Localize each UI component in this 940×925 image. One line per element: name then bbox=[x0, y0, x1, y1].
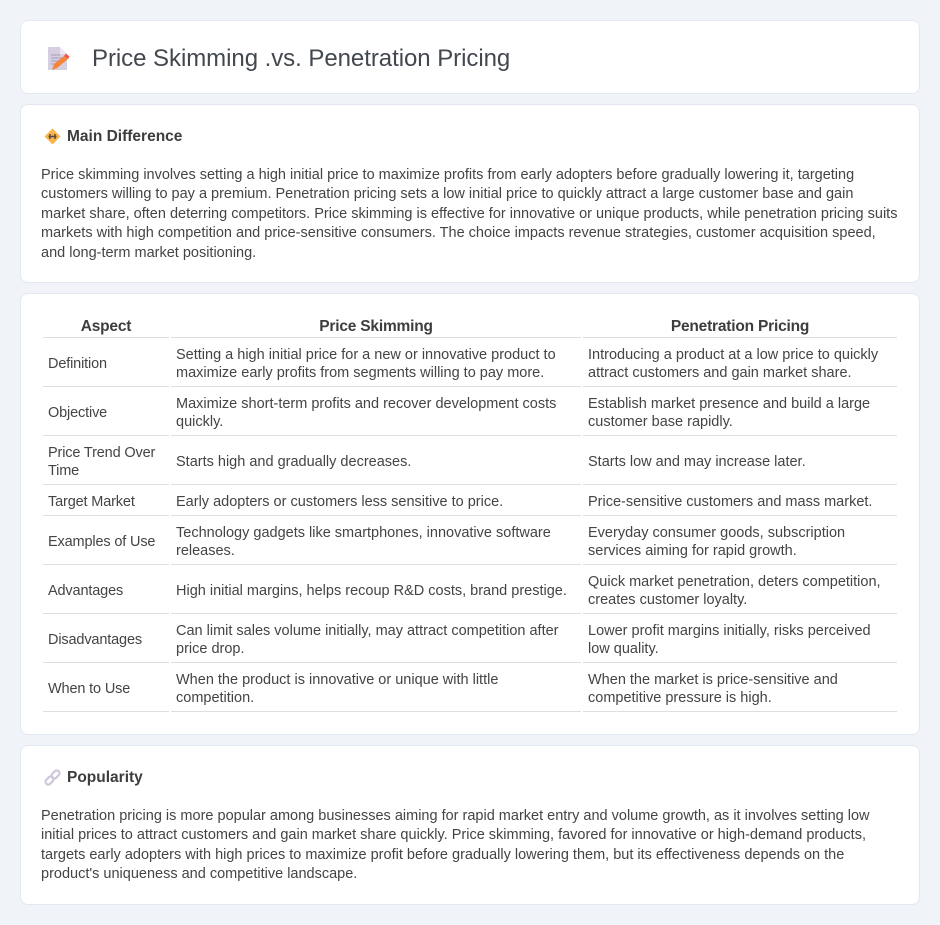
row: when to use bbox=[48, 672, 838, 706]
row: when to use: competitive pressure is high. bbox=[588, 690, 772, 706]
row: when to use: When to Use bbox=[48, 681, 130, 697]
row: disadvantages bbox=[48, 623, 871, 657]
panel: main difference bbox=[20, 104, 920, 283]
row: definition: maximize early profits from segments willing to pay more. bbox=[176, 365, 544, 381]
text block: main difference paragraph bbox=[41, 167, 897, 261]
row: advantages: creates customer loyalty. bbox=[588, 592, 747, 608]
row: definition: Introducing a product at a low price to quickly bbox=[588, 347, 878, 363]
row: price trend over time bbox=[48, 445, 806, 479]
text block: main difference paragraph: markets with high competition and price-sensitive consumers. The choice impacts revenue strategies, customer acquisition speed, bbox=[41, 225, 876, 241]
title: Price Skimming .vs. Penetration Pricing bbox=[92, 45, 510, 72]
row: objective: Objective bbox=[48, 405, 107, 421]
text block: popularity paragraph: Penetration pricing is more popular among businesses aiming for rapid market entry and volume growth, as it involves setting low bbox=[41, 808, 870, 824]
row: disadvantages: Can limit sales volume initially, may attract competition after bbox=[176, 623, 559, 639]
row: target market: Price-sensitive customers and mass market. bbox=[588, 494, 872, 510]
row: price trend over time: Price Trend Over bbox=[48, 445, 155, 461]
row: examples of use: services aiming for rapid growth. bbox=[588, 543, 797, 559]
row: objective: Establish market presence and build a large bbox=[588, 396, 870, 412]
row: objective: quickly. bbox=[176, 414, 223, 430]
icon: chain link bbox=[44, 769, 61, 786]
row: examples of use: Everyday consumer goods, subscription bbox=[588, 525, 845, 541]
row: disadvantages: low quality. bbox=[588, 641, 659, 657]
row: advantages bbox=[48, 574, 881, 608]
row: price trend over time: Starts low and may increase later. bbox=[588, 454, 806, 470]
heading: popularity: Popularity bbox=[67, 769, 143, 786]
icon: document with pencil bbox=[48, 47, 70, 70]
row: disadvantages: price drop. bbox=[176, 641, 245, 657]
row: advantages: Advantages bbox=[48, 583, 123, 599]
text block: popularity paragraph bbox=[41, 808, 870, 882]
row: target market: Early adopters or customers less sensitive to price. bbox=[176, 494, 503, 510]
text block: popularity paragraph: initial prices to attract customers and gain market share quickly. Price skimming, favored for innovative or high-demand products, bbox=[41, 827, 866, 843]
row: price trend over time: Time bbox=[48, 463, 79, 479]
row: examples of use: releases. bbox=[176, 543, 235, 559]
panel: title header bbox=[20, 20, 920, 94]
row: objective: customer base rapidly. bbox=[588, 414, 733, 430]
row: price trend over time: Starts high and gradually decreases. bbox=[176, 454, 411, 470]
table header: price skimming: Price Skimming bbox=[319, 318, 433, 335]
table header: aspect: Aspect bbox=[81, 318, 131, 335]
row: definition: attract customers and gain market share. bbox=[588, 365, 852, 381]
row: target market bbox=[48, 494, 872, 510]
row: definition bbox=[48, 347, 878, 381]
text block: popularity paragraph: targets early adopters with high prices to maximize profit before gradually lowering them, but its effectiveness depends on the bbox=[41, 847, 844, 863]
row: disadvantages: Lower profit margins initially, risks perceived bbox=[588, 623, 871, 639]
row: objective bbox=[48, 396, 870, 430]
row: disadvantages: Disadvantages bbox=[48, 632, 142, 648]
row: advantages: Quick market penetration, deters competition, bbox=[588, 574, 881, 590]
row: when to use: When the product is innovative or unique with little bbox=[176, 672, 498, 688]
text block: main difference paragraph: and long-term market positioning. bbox=[41, 245, 256, 261]
text block: main difference paragraph: market share, often deterring competitors. Price skimming is effective for innovative or unique products, while penetration pricing suits bbox=[41, 206, 897, 222]
panel: comparison table bbox=[20, 293, 920, 735]
text block: main difference paragraph: customers willing to pay a premium. Penetration pricing sets a low initial price to quickly attract a large customer base and gain bbox=[41, 186, 853, 202]
row: examples of use bbox=[48, 525, 845, 559]
row: examples of use: Examples of Use bbox=[48, 534, 155, 550]
row: definition: Definition bbox=[48, 356, 107, 372]
row: examples of use: Technology gadgets like smartphones, innovative software bbox=[176, 525, 551, 541]
row: objective: Maximize short-term profits and recover development costs bbox=[176, 396, 556, 412]
heading: main difference: Main Difference bbox=[67, 128, 182, 145]
icon: warning diamond bbox=[44, 128, 60, 144]
text block: popularity paragraph: product's uniqueness and competitive landscape. bbox=[41, 866, 357, 882]
row: definition: Setting a high initial price for a new or innovative product to bbox=[176, 347, 556, 363]
text block: main difference paragraph: Price skimming involves setting a high initial price to maximize profits from early adopters before gradually lowering it, targeting bbox=[41, 167, 854, 183]
panel: popularity bbox=[20, 745, 920, 905]
row: target market: Target Market bbox=[48, 494, 135, 510]
row: when to use: competition. bbox=[176, 690, 254, 706]
row: advantages: High initial margins, helps recoup R&D costs, brand prestige. bbox=[176, 583, 567, 599]
table header: penetration pricing: Penetration Pricing bbox=[671, 318, 809, 335]
row: when to use: When the market is price-sensitive and bbox=[588, 672, 838, 688]
